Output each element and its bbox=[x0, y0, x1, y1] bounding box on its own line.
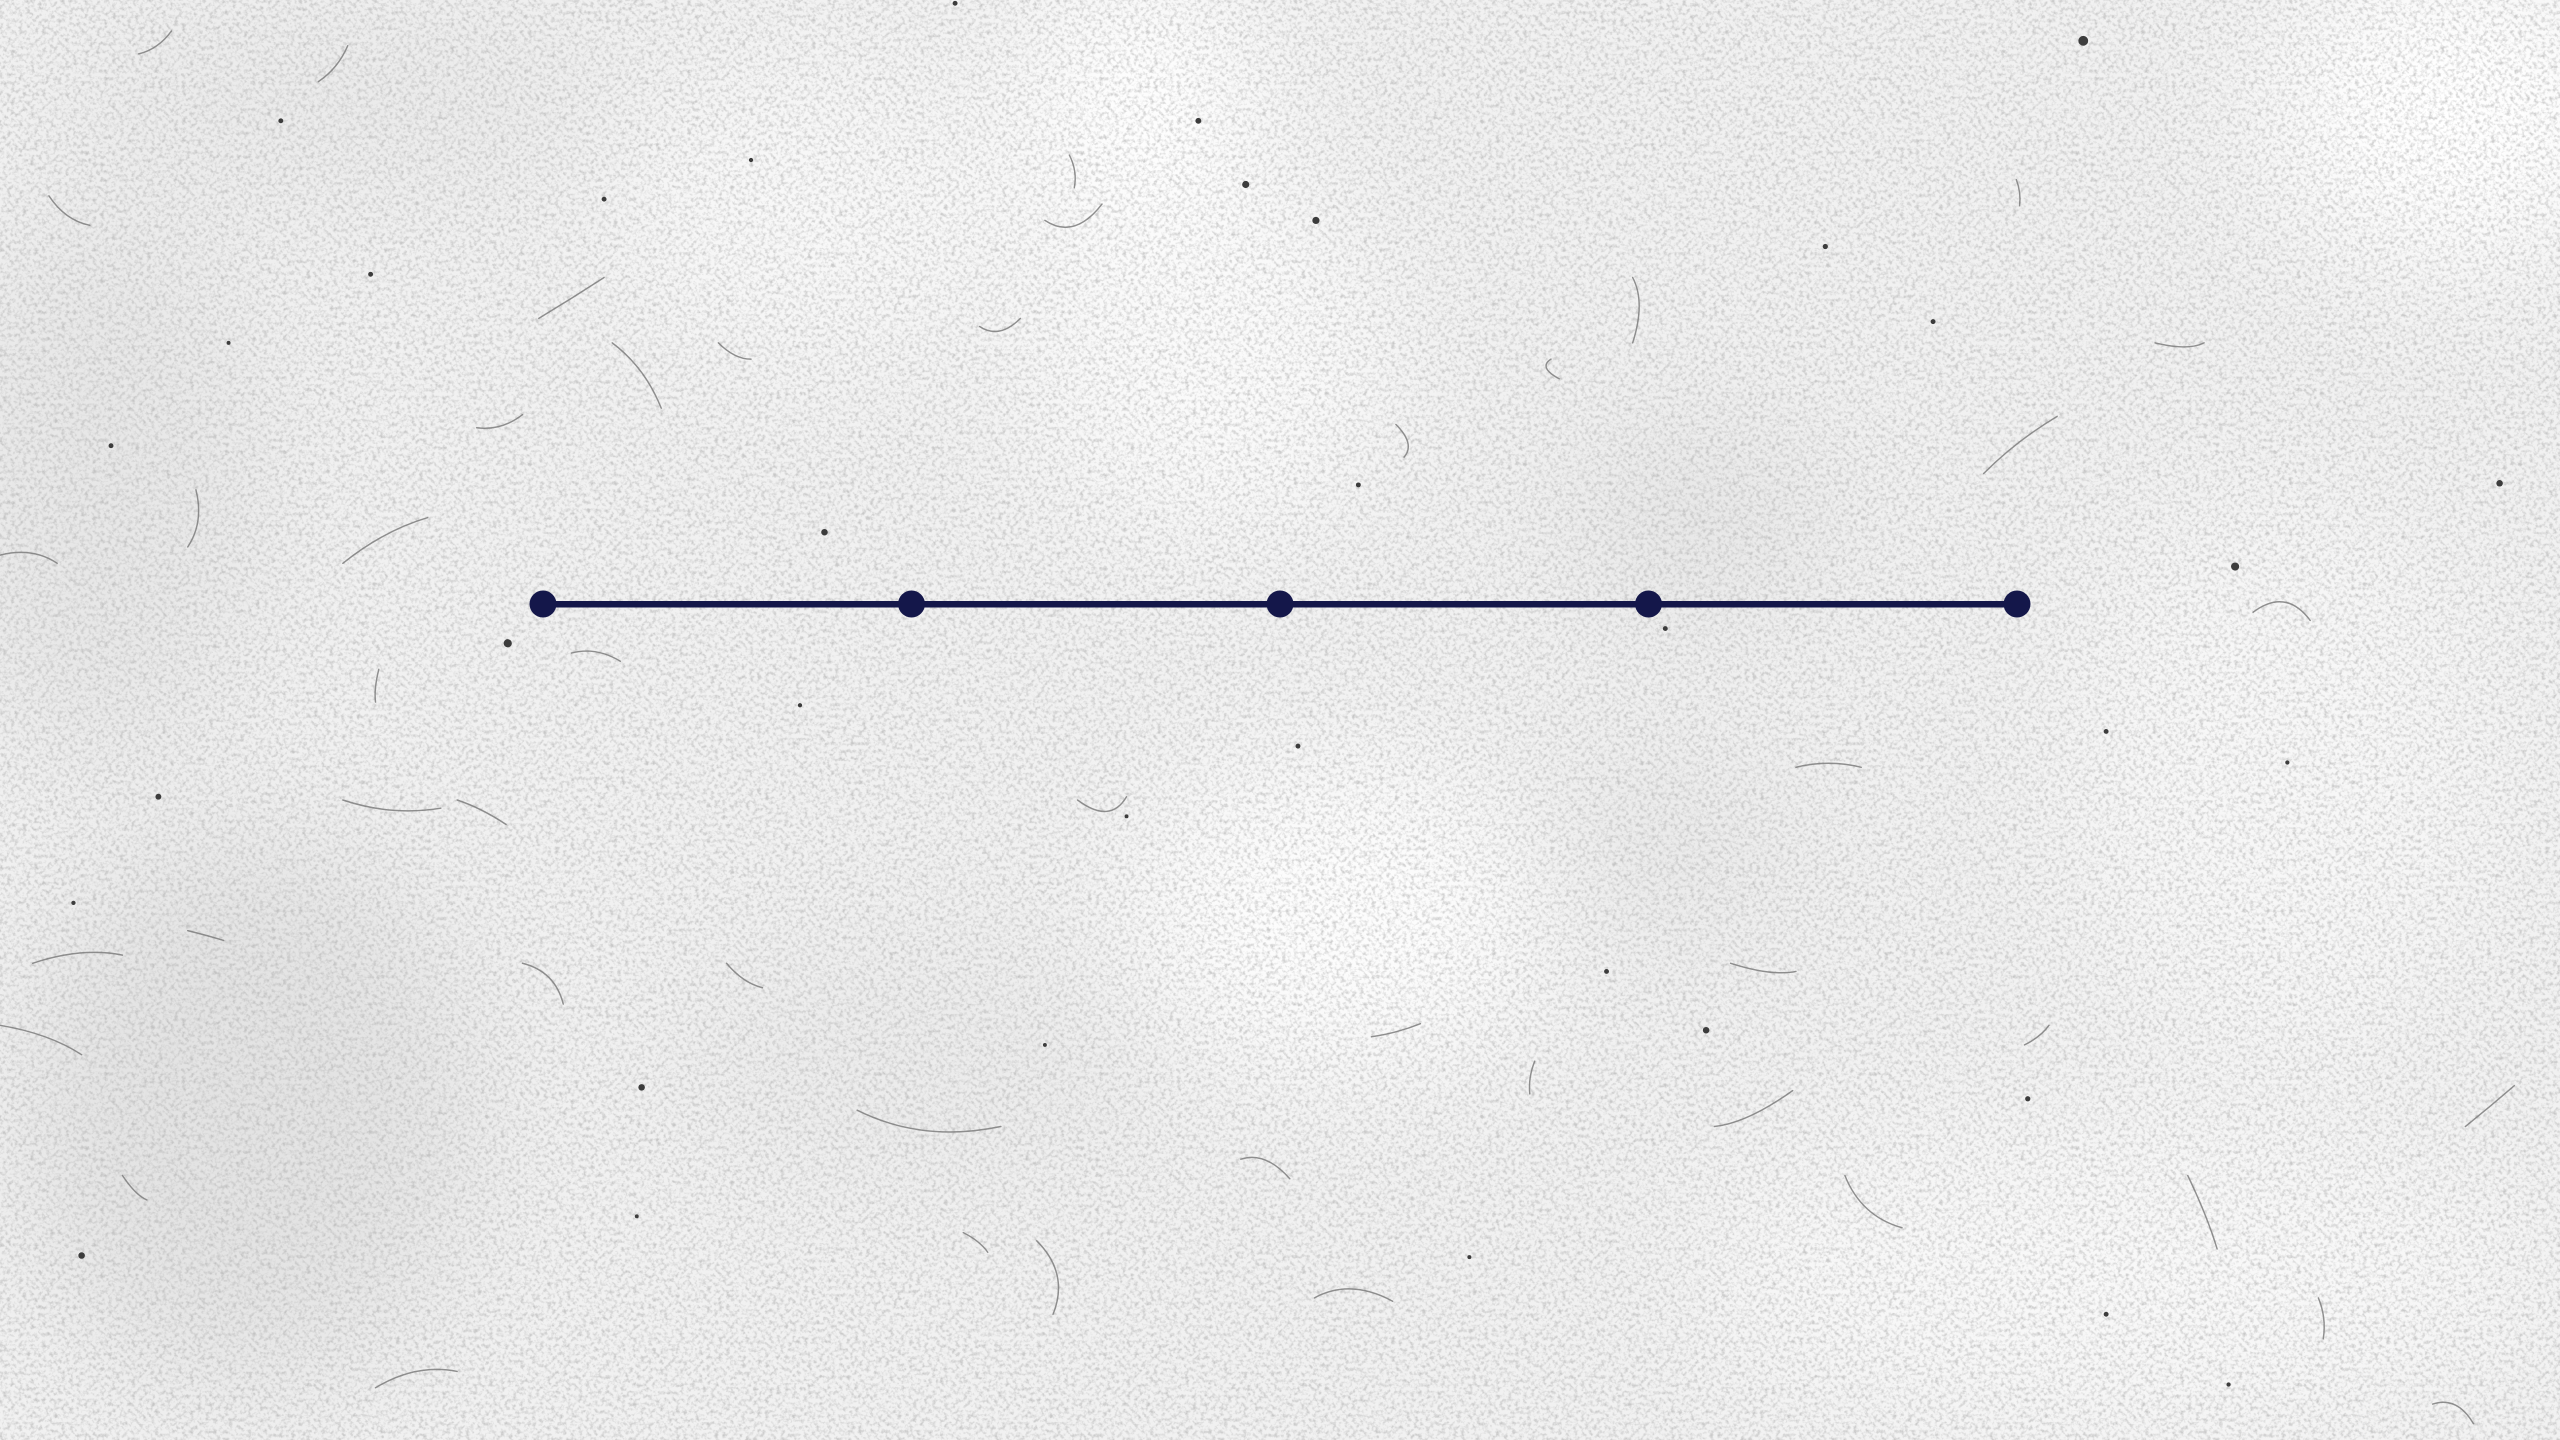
timeline point 5 bbox=[2004, 590, 2030, 618]
timeline point 3 bbox=[1266, 590, 1294, 618]
timeline point 4 bbox=[1635, 590, 1662, 618]
timeline point 1 bbox=[530, 590, 556, 618]
timeline point 2 bbox=[898, 590, 925, 618]
timeline line bbox=[543, 601, 2017, 608]
